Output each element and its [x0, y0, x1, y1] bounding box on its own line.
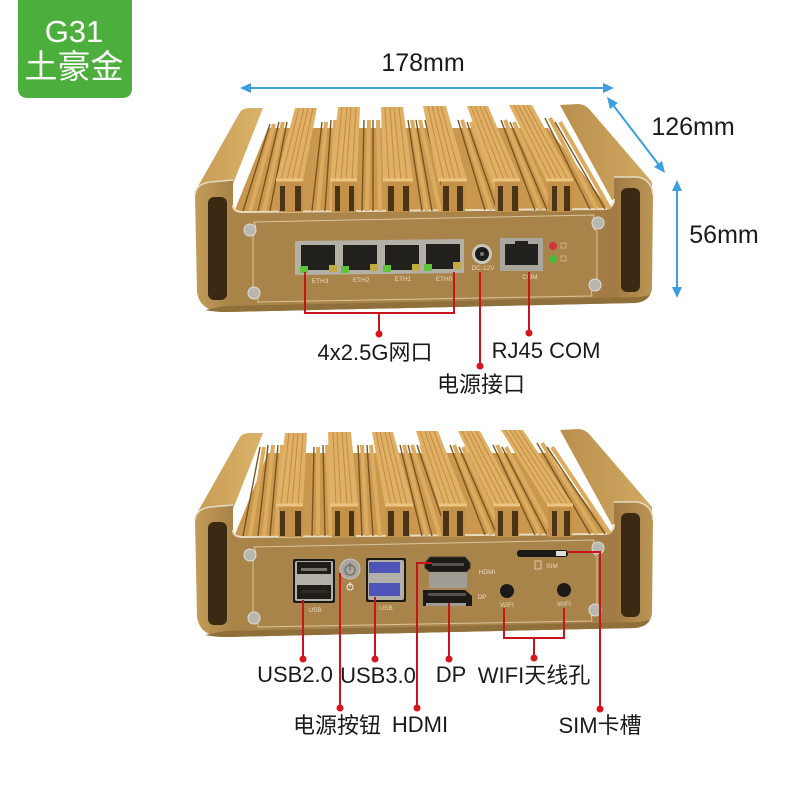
- slot: SIM: [517, 550, 568, 570]
- port: HDMI: HDMI: [479, 569, 495, 576]
- label: USB2.0: USB2.0: [257, 662, 333, 687]
- dimension: width 178mm: 178mm: [381, 49, 465, 77]
- label: 电源按钮: 电源按钮: [293, 713, 381, 738]
- device: front view with USB and display ports: [195, 429, 653, 637]
- port: USB 3.0: USB: [379, 605, 393, 612]
- label: USB3.0: USB3.0: [340, 663, 416, 688]
- badge text: 土豪金: 土豪金: [24, 48, 124, 85]
- label: 电源接口: 电源接口: [437, 372, 525, 397]
- label: RJ45 COM: RJ45 COM: [492, 338, 600, 363]
- port: DP: DP: [477, 594, 487, 601]
- device: rear view with network ports: [195, 104, 653, 312]
- port: RJ45 COM: COM: [522, 274, 538, 281]
- label: 4x2.5G网口: 4x2.5G网口: [318, 340, 432, 365]
- raised heat-sink blocks: [276, 430, 573, 505]
- callout lines: rear ports: [305, 272, 532, 370]
- dimension: height 56mm: [672, 180, 759, 298]
- port block: 4 x ethernet: ETH3: [312, 278, 329, 285]
- raised heat-sink blocks: [276, 105, 573, 180]
- button: power: [340, 559, 360, 590]
- badge: G31 model name: [18, 0, 132, 98]
- port: DC jack: [471, 244, 495, 272]
- callout lines: front ports: [300, 552, 604, 712]
- label: HDMI: HDMI: [392, 712, 448, 737]
- status LEDs: [549, 242, 566, 263]
- port: DP: [423, 590, 487, 606]
- port: USB 3.0: [366, 558, 406, 612]
- label: DP: DP: [436, 662, 466, 687]
- label: WIFI天线孔: WIFI天线孔: [478, 663, 590, 688]
- WIFI antenna hole right: WIFI: [557, 601, 571, 608]
- port block: 4 x ethernet: ETH1: [395, 276, 412, 283]
- badge text: G31: G31: [45, 14, 103, 49]
- port: RJ45 COM: [500, 238, 543, 281]
- low heat-sink fins: [250, 118, 610, 211]
- WIFI antenna hole left: [500, 584, 514, 609]
- WIFI antenna hole left: WIFI: [500, 602, 514, 609]
- port: USB 2.0: USB: [308, 607, 322, 614]
- port block: 4 x ethernet: [295, 239, 464, 285]
- port: HDMI: [425, 557, 495, 588]
- dimension: depth 126mm: 126mm: [651, 113, 735, 141]
- WIFI antenna hole right: [557, 583, 571, 608]
- dimension: height 56mm: 56mm: [689, 221, 759, 249]
- dimension: width 178mm: [240, 49, 614, 93]
- port block: 4 x ethernet: ETH2: [353, 277, 370, 284]
- port block: 4 x ethernet: ETH0: [436, 276, 453, 283]
- port: DC jack: DC-12V: [471, 265, 495, 272]
- slot: SIM: SIM: [546, 563, 558, 570]
- port: USB 2.0: [293, 559, 335, 614]
- dimension: depth 126mm: [607, 97, 735, 173]
- label: SIM卡槽: SIM卡槽: [558, 713, 642, 738]
- low heat-sink fins: [250, 443, 610, 536]
